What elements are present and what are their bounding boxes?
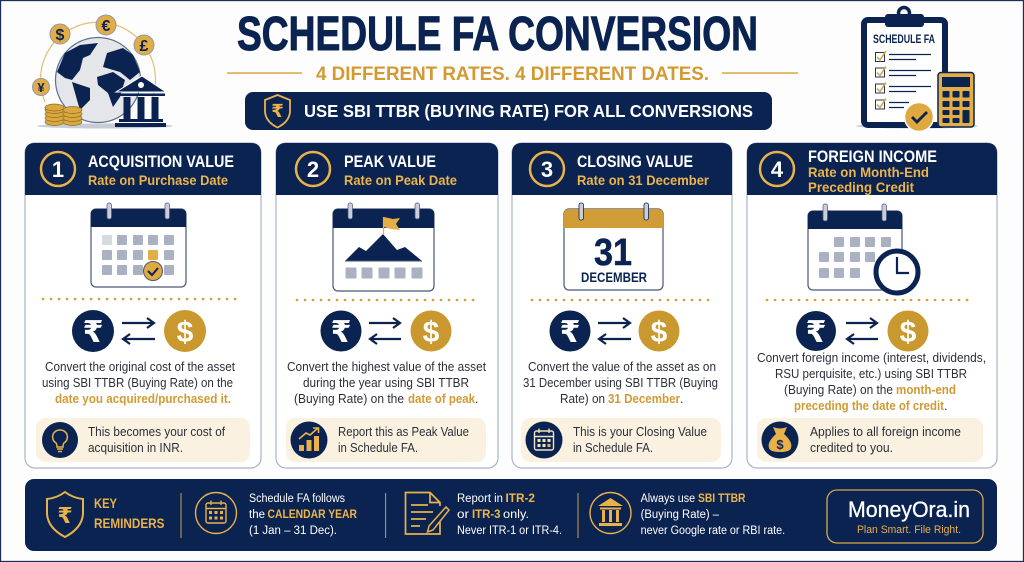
illustration: globe, currency coins and bank: £: [140, 38, 149, 55]
card 4 description: RSU perquisite, etc.) using SBI TTBR: [775, 367, 967, 381]
panel: foreign income: [747, 143, 997, 468]
banner: use SBI TTBR: [245, 92, 772, 130]
card 2 header: Rate on Peak Date: [344, 172, 457, 188]
reminder: ITR forms: only.: [503, 509, 529, 521]
card 3 description: .: [680, 392, 683, 406]
icon: rupee to dollar conversion: [550, 310, 680, 352]
icon: calendar with clock: [808, 204, 918, 293]
reminder: ITR forms: Report in: [457, 493, 503, 505]
card 4 description: (Buying Rate) on the: [784, 383, 893, 397]
card 3 description: 31 December using SBI TTBR (Buying: [523, 376, 718, 390]
card 4 description: .: [944, 399, 947, 413]
card 3 description: 31 December: [608, 392, 680, 406]
card 2 callout: [286, 418, 486, 462]
card 1 description: Convert the original cost of the asset: [45, 360, 235, 374]
card 3 description: Convert the value of the asset as on: [528, 360, 716, 374]
reminder: calendar year: CALENDAR YEAR: [268, 509, 358, 521]
icon: rupee to dollar conversion: [72, 310, 206, 352]
card 4 callout: credited to you.: [810, 441, 893, 455]
card 1 description: using SBI TTBR (Buying Rate) on the: [42, 376, 233, 390]
card 3 header: 3: [541, 157, 553, 182]
icon: rupee to dollar conversion: ₹: [560, 316, 580, 349]
card 3 callout: [521, 418, 721, 462]
reminder: ITR forms: ITR-2: [506, 493, 535, 505]
illustration: globe, currency coins and bank: ¥: [37, 80, 45, 95]
card 3 header: [512, 143, 732, 195]
icon: rupee to dollar conversion: $: [900, 316, 917, 349]
reminder: ITR forms: Never ITR-1 or ITR-4.: [457, 525, 562, 537]
card 2 header: 2: [307, 157, 319, 182]
card 3 callout: This is your Closing Value: [573, 425, 707, 439]
key reminders label: [47, 492, 164, 537]
card 3 callout: in Schedule FA.: [573, 441, 653, 455]
icon: rupee to dollar conversion: ₹: [331, 316, 351, 349]
banner: use SBI TTBR: ₹: [271, 101, 284, 121]
icon: money bag: $: [776, 437, 784, 452]
key reminders label: ₹: [57, 503, 73, 528]
brand: MoneyOra.in: Plan Smart. File Right.: [857, 524, 961, 536]
reminder: calendar year: Schedule FA follows: [249, 493, 345, 505]
reminder: always use SBI TTBR: never Google rate or RBI rate.: [641, 525, 785, 537]
card 2 callout: in Schedule FA.: [338, 441, 418, 455]
panel: peak value: [276, 143, 498, 468]
card 3 description: Rate) on: [560, 392, 605, 406]
reminder: calendar year: [196, 492, 358, 537]
icon: money bag: [762, 422, 798, 458]
icon: 31 December calendar: [564, 203, 663, 290]
card 2 description: [287, 360, 486, 406]
card 1 header: [25, 143, 261, 195]
card 2 description: date of peak: [408, 392, 475, 406]
card 1 description: [42, 360, 235, 406]
brand: MoneyOra.in: [827, 490, 983, 543]
icon: calendar with mountain and flag: [333, 203, 434, 291]
card 3 header: CLOSING VALUE: [577, 153, 693, 171]
card 2 callout: Report this as Peak Value: [338, 425, 469, 439]
card 4 header: Rate on Month-End: [808, 164, 929, 180]
card 1 callout: This becomes your cost of: [88, 425, 225, 439]
card 4 description: preceding the date of credit: [794, 399, 945, 413]
icon: rupee to dollar conversion: $: [423, 316, 440, 349]
panel: key reminders footer: [25, 479, 997, 551]
illustration: Schedule FA clipboard and calculator: [856, 8, 978, 132]
banner: use SBI TTBR: USE SBI TTBR (BUYING RATE) FOR ALL CONVERSIONS: [304, 101, 753, 121]
panel: acquisition value: [25, 143, 261, 468]
reminder: always use SBI TTBR: Always use: [641, 493, 695, 505]
reminder: calendar year: (1 Jan – 31 Dec).: [249, 525, 337, 537]
reminder: ITR forms: ITR-3: [472, 509, 500, 521]
card 1 callout: [36, 418, 250, 462]
reminder: always use SBI TTBR: SBI TTBR: [698, 493, 746, 505]
card 4 callout: [757, 418, 983, 462]
subtitle: 4 DIFFERENT RATES. 4 DIFFERENT DATES.: [316, 63, 709, 85]
icon: calendar: [526, 422, 562, 458]
card 3 description: [523, 360, 718, 406]
card 1 description: date you acquired/purchased it.: [55, 392, 231, 406]
icon: lightbulb: [42, 422, 78, 458]
brand: MoneyOra.in: MoneyOra.in: [848, 497, 970, 522]
card 2 description: .: [475, 392, 478, 406]
icon: rupee to dollar conversion: ₹: [806, 316, 826, 349]
card 4 callout: Applies to all foreign income: [810, 425, 961, 439]
card 2 header: [276, 143, 498, 195]
card 1 callout: acquisition in INR.: [88, 441, 183, 455]
card 2 description: Convert the highest value of the asset: [287, 360, 486, 374]
icon: 31 December calendar: DECEMBER: [581, 269, 647, 285]
icon: 31 December calendar: 31: [594, 232, 632, 274]
illustration: Schedule FA clipboard and calculator: SCHEDULE FA: [873, 32, 935, 46]
card 2 header: PEAK VALUE: [344, 153, 436, 171]
card 1 header: 1: [52, 157, 64, 182]
illustration: globe, currency coins and bank: [32, 15, 173, 128]
icon: rupee to dollar conversion: ₹: [83, 316, 103, 349]
reminder: calendar year: the: [249, 509, 265, 521]
title: SCHEDULE FA CONVERSION: [237, 8, 758, 61]
reminder: ITR forms: or: [457, 509, 469, 521]
illustration: globe, currency coins and bank: $: [56, 27, 65, 44]
icon: rupee to dollar conversion: $: [651, 316, 668, 349]
icon: rupee to dollar conversion: [796, 310, 928, 352]
card 1 header: Rate on Purchase Date: [88, 172, 228, 188]
illustration: globe, currency coins and bank: €: [102, 18, 111, 35]
card 4 description: Convert foreign income (interest, dividends,: [757, 351, 986, 365]
reminder: always use SBI TTBR: (Buying Rate) –: [641, 509, 720, 521]
card 4 header: [747, 143, 997, 195]
card 1 header: ACQUISITION VALUE: [88, 153, 234, 171]
card 3 header: Rate on 31 December: [577, 172, 709, 188]
card 4 header: 4: [771, 157, 784, 182]
icon: rupee to dollar conversion: $: [177, 316, 194, 349]
card 4 description: month-end: [896, 383, 956, 397]
card 4 header: FOREIGN INCOME: [808, 148, 937, 166]
card 4 header: Preceding Credit: [808, 179, 914, 195]
card 2 description: (Buying Rate) on the: [294, 392, 404, 406]
card 2 description: during the year using SBI TTBR: [303, 376, 469, 390]
key reminders label: REMINDERS: [94, 515, 164, 531]
icon: rising bar chart: [290, 422, 328, 458]
panel: closing value: [512, 143, 732, 468]
card 4 description: [757, 351, 986, 413]
reminder: ITR forms: [406, 492, 562, 537]
icon: rupee to dollar conversion: [320, 310, 452, 352]
key reminders label: KEY: [94, 495, 118, 511]
icon: calendar with check: [91, 203, 186, 287]
reminder: always use SBI TTBR: [590, 492, 785, 537]
